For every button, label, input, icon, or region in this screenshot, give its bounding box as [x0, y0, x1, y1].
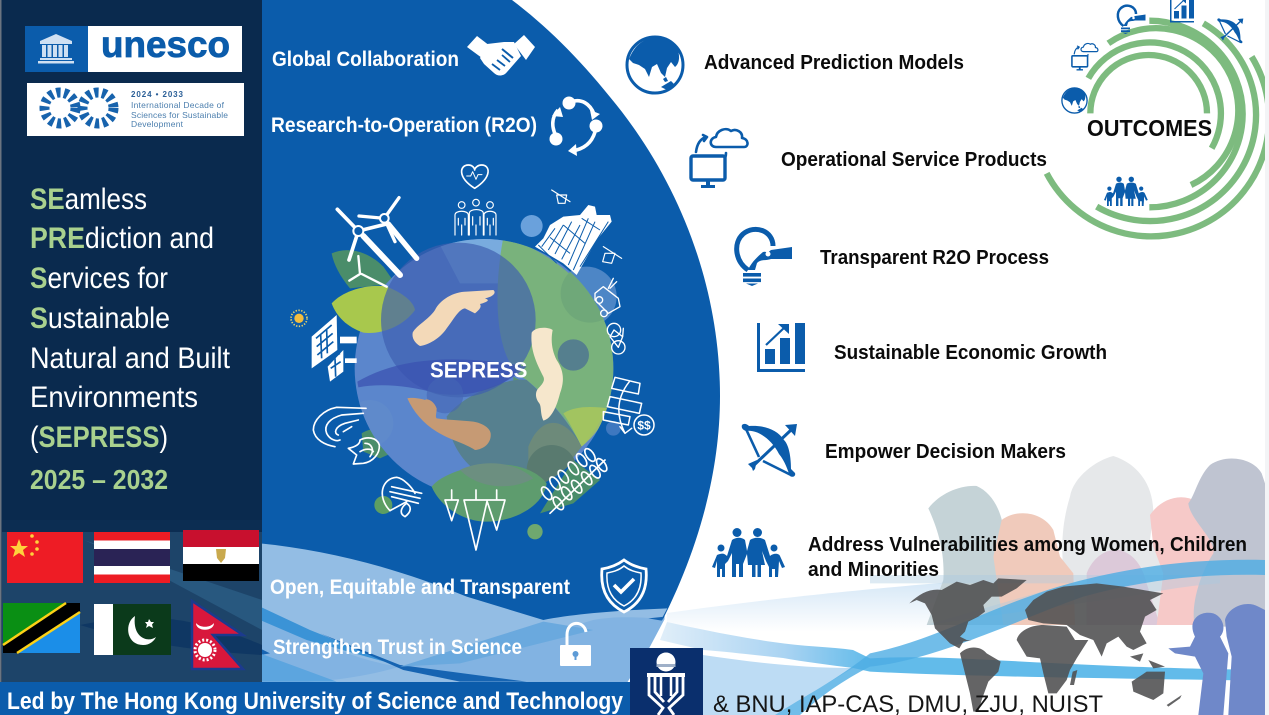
outcome: Transparent R2O Process — [737, 229, 1049, 286]
flag: China — [7, 532, 83, 583]
waves on white side — [667, 578, 1000, 715]
concentric arcs — [1047, 21, 1269, 236]
outcome: Address Vulnerabilities — [712, 528, 1247, 581]
icon: city skyline — [535, 205, 612, 275]
icon: rain cloud — [382, 477, 422, 517]
flag: Nepal — [192, 601, 243, 669]
icon: bicycle — [607, 323, 625, 354]
panel: left sidebar — [0, 0, 262, 682]
flag: Pakistan — [94, 604, 171, 655]
UNESCO logo — [25, 24, 242, 72]
icon: flame — [348, 438, 379, 464]
title: Natural and Built — [30, 342, 231, 375]
ring icon: globe — [1062, 88, 1087, 113]
icon: downward triangles — [445, 490, 505, 550]
hand: top — [412, 290, 495, 346]
outcome: Advanced Prediction Models: Advanced Prediction Models — [704, 52, 964, 74]
SEPRESS label: SEPRESS — [430, 358, 527, 383]
bottom bar: lead institution: Led by The Hong Kong University of Science and Technology — [7, 688, 624, 715]
heading: OUTCOMES: OUTCOMES — [1087, 115, 1212, 141]
outcome: Address Vulnerabilities: and Minorities — [808, 559, 939, 581]
outcome: Transparent R2O Process: Transparent R2O Process — [820, 247, 1049, 269]
icon: drone two — [603, 247, 622, 263]
UNESCO logo: unesco — [101, 24, 230, 65]
title — [30, 183, 231, 495]
heading: Open, Equitable and Transparent: Open, Equitable and Transparent — [270, 576, 570, 599]
silhouette: pink woman — [1150, 497, 1214, 625]
silhouette: salmon child — [993, 513, 1075, 625]
flag: Egypt — [183, 530, 259, 581]
icon: solar panels — [312, 315, 357, 382]
panel: central blue circle — [0, 0, 720, 715]
icon: people — [455, 199, 496, 235]
icon: sun — [291, 310, 307, 326]
Decade of Sciences logo — [27, 83, 244, 136]
silhouette: grey woman — [1062, 456, 1162, 617]
outcome: Address Vulnerabilities: Address Vulnerabilities among Women, Children — [808, 534, 1247, 556]
heading: Strengthen Trust in Science: Strengthen Trust in Science — [273, 636, 522, 659]
icon: handshake — [467, 35, 535, 76]
icon: temple — [38, 34, 74, 64]
waves inside blue circle — [260, 543, 667, 683]
icon: padlock — [560, 623, 591, 666]
heading: Research-to-Operation: Research-to-Operation (R2O) — [271, 114, 537, 137]
outcome: Advanced Prediction Models — [627, 37, 964, 93]
Decade of Sciences logo: International Decade of — [131, 100, 225, 110]
rising band — [775, 560, 1265, 715]
Decade of Sciences logo: Sciences for Sustainable — [131, 110, 228, 120]
outcome: Empower Decision Makers — [742, 424, 1066, 477]
decorative silhouettes, bands and world map — [660, 456, 1265, 715]
logo: HKUST — [630, 648, 703, 715]
outcome: Sustainable Economic Growth — [757, 323, 1107, 372]
Decade of Sciences logo: 2024 • 2033 — [131, 90, 184, 99]
icon: wind turbines — [337, 198, 417, 287]
ring icon: chart — [1170, 0, 1194, 22]
title: Sustainable — [30, 302, 170, 335]
outcome: Operational Service Products: Operational Service Products — [781, 149, 1047, 171]
outcome: Operational Service Products — [691, 129, 1047, 188]
icon: heart — [462, 165, 488, 188]
outcomes ring diagram — [1047, 0, 1269, 236]
title: (SEPRESS) — [30, 421, 168, 454]
heading: Global Collaboration: Global Collaboration — [272, 48, 459, 71]
silhouette: hijab woman — [926, 486, 1003, 625]
icon: drone one — [552, 190, 570, 203]
title: 2025 – 2032 — [30, 464, 168, 495]
title: PREdiction and — [30, 222, 214, 255]
title: Environments — [30, 381, 198, 414]
hand: bottom — [407, 398, 491, 450]
icon: wheat — [539, 447, 609, 513]
title: Services for — [30, 262, 168, 295]
hand: right — [531, 328, 563, 421]
ring icon: family — [1104, 177, 1148, 206]
Decade of Sciences logo: Development — [131, 119, 184, 129]
flag: Tanzania — [3, 603, 80, 653]
ring icon: monitor and cloud — [1072, 43, 1098, 71]
globe — [332, 237, 619, 522]
ring icon: bulb — [1118, 6, 1146, 34]
silhouette: two blue children — [1168, 604, 1265, 715]
world map — [909, 578, 1182, 712]
band haze — [870, 575, 1220, 625]
icon: money flow: $$ — [637, 418, 651, 432]
icon: truck — [595, 278, 620, 317]
descending band — [660, 622, 1265, 681]
outcome: Empower Decision Makers: Empower Decision Makers — [825, 441, 1066, 463]
flag: Thailand — [94, 532, 170, 583]
icon: cycle arrows — [550, 96, 602, 156]
title: SEamless — [30, 183, 147, 216]
background bubbles and leaves — [332, 215, 621, 539]
icon: tornado — [313, 407, 366, 447]
panel: SEPRESS globe illustration — [291, 165, 654, 550]
outcome: Sustainable Economic Growth: Sustainable Economic Growth — [834, 342, 1107, 364]
icon: money flow — [603, 377, 654, 435]
icon: shield — [602, 560, 646, 612]
lime leaf — [332, 286, 415, 333]
ring icon: bow — [1217, 18, 1243, 43]
silhouette: purple child — [1087, 550, 1160, 625]
silhouette: tall woman — [1188, 459, 1265, 627]
